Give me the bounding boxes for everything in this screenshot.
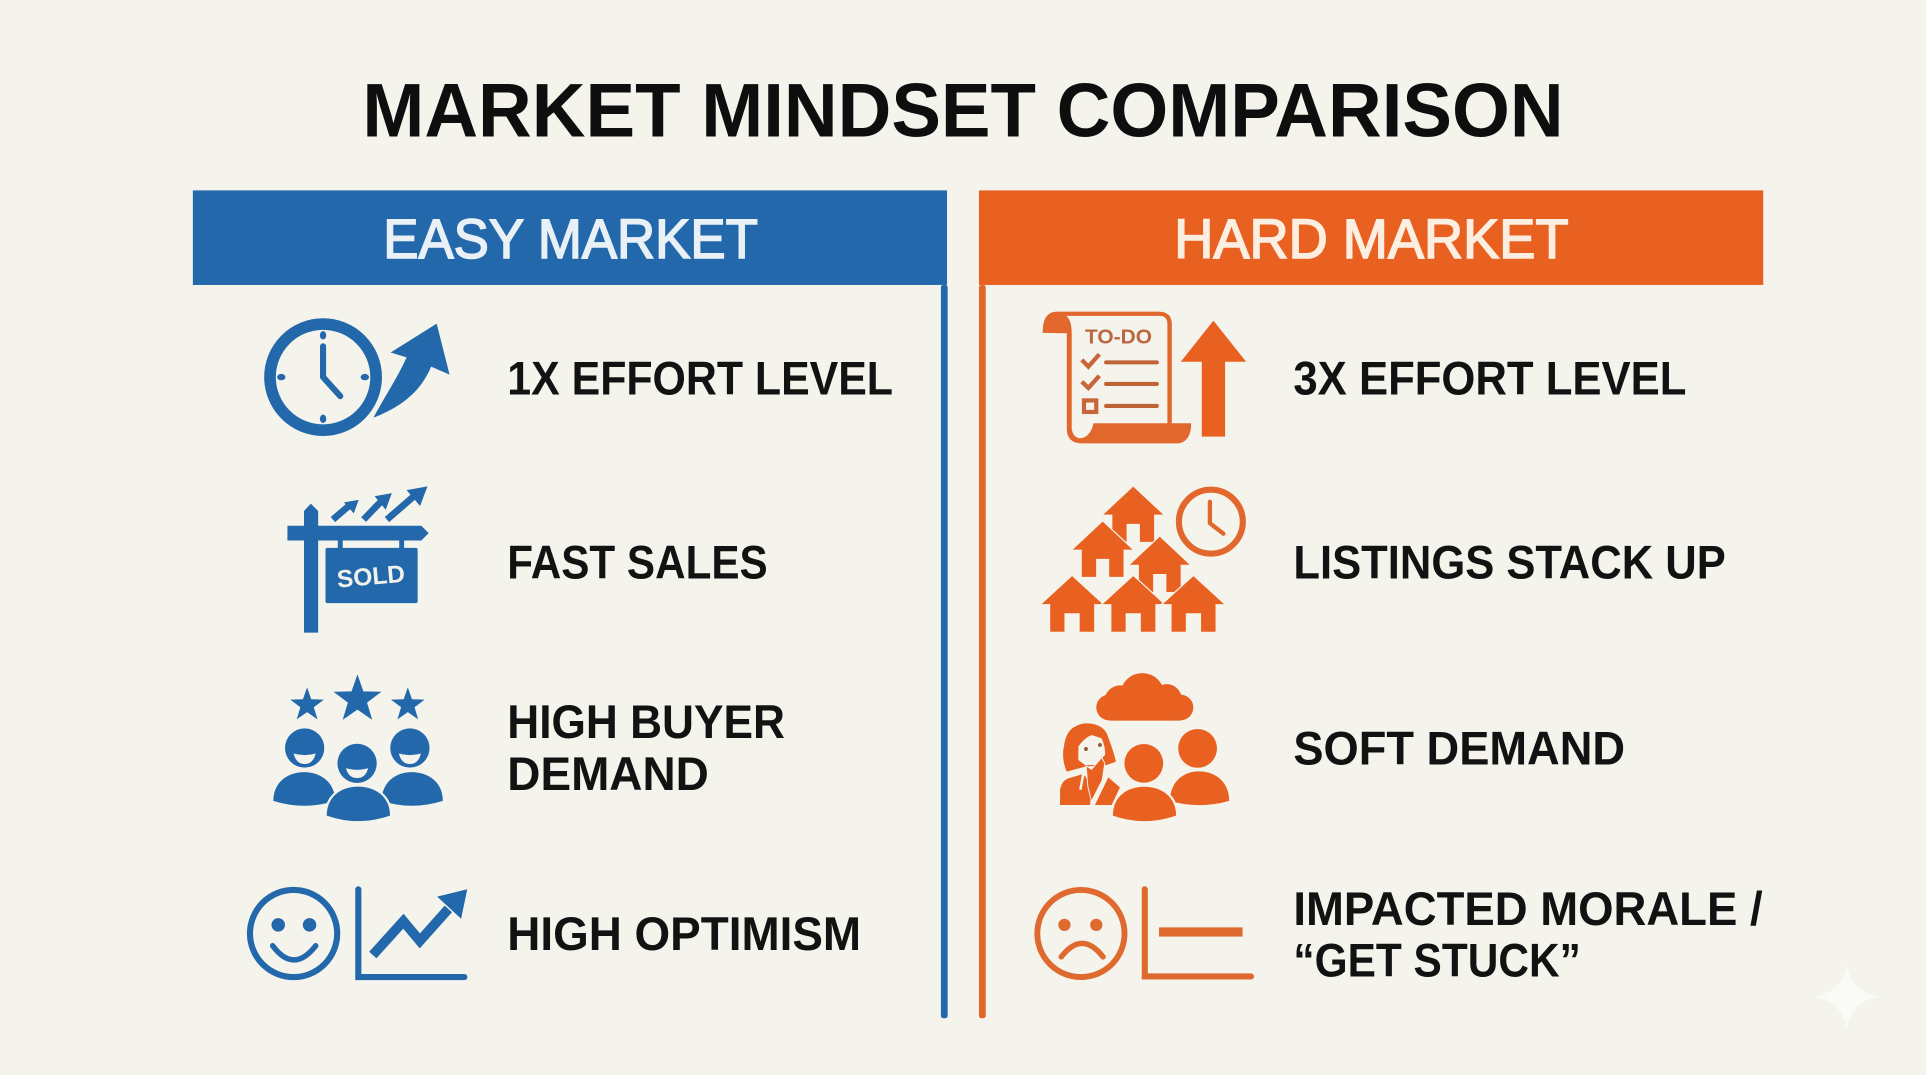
label: impacted morale / get stuck: “GET STUCK” [1293, 934, 1581, 987]
label: impacted morale / get stuck [1293, 883, 1763, 987]
title: MARKET MINDSET COMPARISON [362, 68, 1564, 153]
icon: sold sign with arrows [287, 486, 429, 633]
label: fast sales: FAST SALES [507, 537, 768, 590]
icon: stacked houses with clock [1042, 487, 1243, 632]
icon: doubtful buyers under cloud [1060, 673, 1229, 821]
label: high optimism: HIGH OPTIMISM [507, 908, 861, 961]
icon: smiley with growth chart [250, 889, 467, 977]
header: easy market: EASY MARKET [383, 208, 758, 270]
icon: sad face with flat chart [1037, 889, 1251, 977]
label: high buyer demand: DEMAND [507, 748, 709, 801]
label: soft demand: SOFT DEMAND [1293, 723, 1625, 776]
label: high buyer demand: HIGH BUYER [507, 696, 785, 749]
icon: to-do scroll with up arrow [1043, 312, 1246, 443]
label: listings stack up: LISTINGS STACK UP [1293, 537, 1726, 590]
header: hard market [979, 190, 1763, 285]
label: 1x effort level: 1X EFFORT LEVEL [507, 352, 893, 405]
header: hard market: HARD MARKET [1174, 208, 1569, 270]
icon: sparkle watermark [1813, 963, 1881, 1030]
header: easy market [193, 190, 947, 285]
label: impacted morale / get stuck: IMPACTED MORALE / [1293, 883, 1763, 936]
label: high buyer demand [507, 696, 785, 801]
icon: clock with rising arrow [270, 324, 450, 430]
label: 3x effort level: 3X EFFORT LEVEL [1293, 352, 1686, 405]
icon: happy buyers with stars [273, 674, 443, 821]
panel: hard market [979, 190, 1763, 1018]
panel: easy market [193, 190, 948, 1018]
icon: to-do scroll with up arrow: TO-DO [1085, 325, 1152, 348]
icon: sold sign with arrows: SOLD [336, 561, 406, 594]
